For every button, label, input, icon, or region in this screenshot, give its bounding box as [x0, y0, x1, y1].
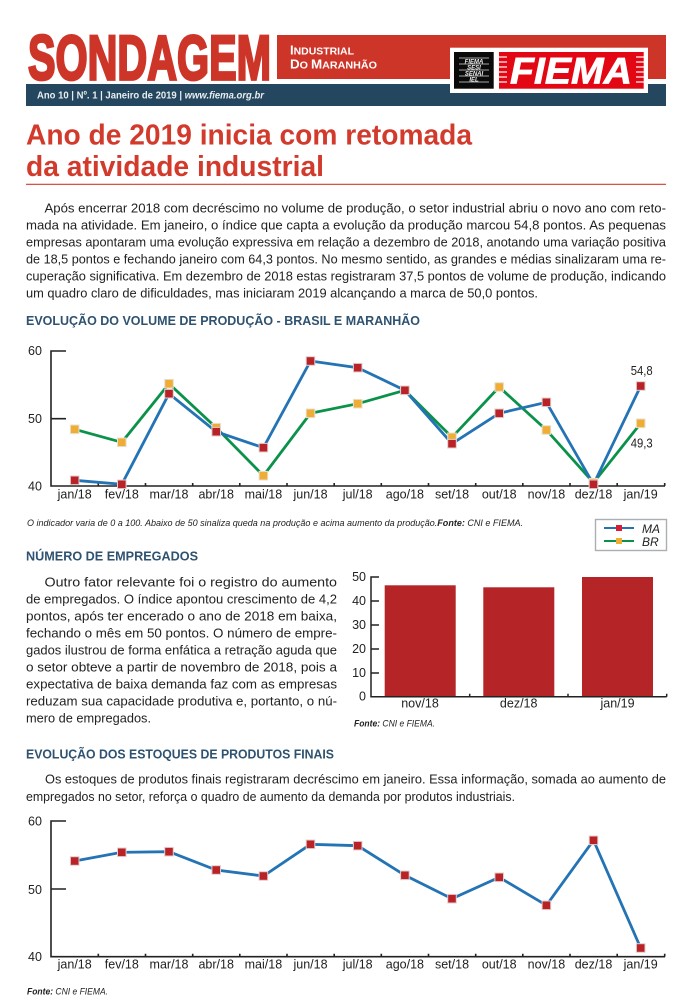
- line chart: production volume: jan/19: [623, 487, 658, 501]
- logo: FIEMA: SENAI: [465, 72, 483, 78]
- line chart: production volume: nov/18: [528, 487, 565, 501]
- line chart: production volume: fev/18: [105, 487, 139, 501]
- masthead title: SONDAGEM: [28, 24, 271, 94]
- main title: da atividade industrial: [26, 151, 324, 183]
- line chart: production volume: mai/18: [245, 487, 282, 501]
- bar chart: employees: 20: [352, 642, 366, 656]
- intro paragraph: Após encerrar 2018 com decréscimo no volume de produção, o setor industrial abriu o novo ano com reto-: [44, 201, 666, 216]
- employees paragraph: fechando o mês em 50 pontos. O número de empre-: [26, 626, 337, 641]
- line chart: production volume: 50: [28, 412, 42, 426]
- line chart: stocks: jul/18: [342, 958, 373, 972]
- intro paragraph: cuperação significativa. Em dezembro de 2018 estas registraram 37,5 pontos de volume de produção, indicando: [26, 269, 666, 284]
- line chart: production volume: out/18: [482, 487, 517, 501]
- bar chart: employees: 30: [352, 618, 366, 632]
- masthead subtitle: DO MARANHÃO: [290, 58, 377, 72]
- series: BR: [75, 384, 641, 483]
- main title: [26, 119, 473, 183]
- line chart: production volume: 60: [28, 344, 42, 358]
- line chart: stocks: ago/18: [386, 958, 424, 972]
- series: stocks: [75, 840, 641, 948]
- line chart: stocks: set/18: [435, 958, 469, 972]
- employees paragraph: pontos, após ter encerado o ano de 2018 em baixa,: [26, 609, 337, 624]
- bar chart source: Fonte: CNI e FIEMA.: [354, 719, 435, 730]
- logo: FIEMA: IEL: [469, 78, 479, 84]
- logo: FIEMA: FIEMA: [510, 50, 632, 91]
- chart note: O indicador varia de 0 a 100. Abaixo de 50 sinaliza queda na produção e acima aumento da produção.Fonte: CNI e FIEMA.: [27, 518, 523, 529]
- markers: stocks: [70, 836, 645, 952]
- line chart: production volume: mar/18: [150, 487, 188, 501]
- intro paragraph: empresas apontaram uma evolução expressiva em relação a dezembro de 2018, anotando uma variação positiva: [26, 235, 667, 250]
- stocks chart source: Fonte: CNI e FIEMA.: [27, 986, 108, 997]
- bar chart: employees: nov/18: [401, 696, 439, 710]
- line chart: stocks: jan/19: [623, 958, 658, 972]
- line chart: production volume: jan/18: [57, 487, 92, 501]
- bar chart: employees: 50: [352, 570, 366, 584]
- line chart: stocks: jan/18: [57, 958, 92, 972]
- employees paragraph: [26, 575, 338, 726]
- bar chart: employees: 0: [359, 690, 366, 704]
- line chart: stocks: 50: [28, 883, 42, 897]
- intro paragraph: [26, 201, 667, 300]
- intro paragraph: mada na atividade. Em janeiro, o índice que capta a evolução da produção marcou 54,8 pontos. As pequenas: [26, 218, 667, 233]
- bar chart: employees: 40: [352, 594, 366, 608]
- markers: BR: [70, 379, 645, 487]
- line chart: production volume: set/18: [435, 487, 469, 501]
- heading: production: EVOLUÇÃO DO VOLUME DE PRODUÇÃO - BRASIL E MARANHÃO: [26, 313, 420, 328]
- red band: [277, 35, 666, 79]
- bar chart: employees: [352, 570, 667, 710]
- bar chart: employees: dez/18: [500, 696, 538, 710]
- line chart: stocks: mar/18: [150, 958, 188, 972]
- stocks paragraph: Os estoques de produtos finais registraram decréscimo em janeiro. Essa informação, somada ao aumento de: [45, 771, 666, 786]
- series: MA: [75, 361, 641, 484]
- masthead subtitle: INDUSTRIAL: [290, 44, 354, 58]
- line chart: stocks: abr/18: [198, 958, 234, 972]
- main title: Ano de 2019 inicia com retomada: [26, 119, 473, 151]
- line chart: production volume: abr/18: [198, 487, 234, 501]
- line chart: stocks: dez/18: [575, 958, 612, 972]
- line chart: production volume: dez/18: [575, 487, 612, 501]
- heading: employees: NÚMERO DE EMPREGADOS: [26, 549, 198, 564]
- value label: MA: 54,8: [631, 364, 653, 378]
- bar chart: employees: jan/19: [599, 696, 635, 710]
- legend: BR: [642, 535, 659, 549]
- employees paragraph: mero de empregados.: [26, 711, 151, 726]
- line chart: stocks: out/18: [482, 958, 517, 972]
- line chart: production volume: jun/18: [292, 487, 328, 501]
- legend: [596, 520, 666, 550]
- header banner: [26, 24, 666, 106]
- line chart: production volume: 40: [28, 480, 42, 494]
- line chart: stocks: mai/18: [245, 958, 282, 972]
- masthead subtitle: [290, 44, 377, 72]
- heading: stocks: EVOLUÇÃO DOS ESTOQUES DE PRODUTOS FINAIS: [26, 746, 334, 762]
- line chart: production volume: ago/18: [386, 487, 424, 501]
- line chart: stocks: nov/18: [528, 958, 565, 972]
- employees paragraph: de empregados. O índice apontou crescimento de 4,2: [26, 591, 337, 606]
- line chart: stocks: [28, 815, 665, 972]
- logo: FIEMA: FIEMA: [465, 60, 483, 66]
- line chart: stocks: 60: [28, 815, 42, 829]
- employees paragraph: expectativa de baixa demanda faz com as empresas: [26, 677, 337, 692]
- blue issue bar: [26, 84, 666, 106]
- line chart: stocks: jun/18: [292, 958, 328, 972]
- employees paragraph: o setor obteve a partir de novembro de 2018, pois a: [26, 660, 338, 675]
- line chart: production volume: jul/18: [342, 487, 373, 501]
- stocks paragraph: empregados no setor, reforça o quadro de aumento da demanda por produtos industriais.: [26, 789, 515, 804]
- markers: MA: [70, 357, 645, 489]
- logo: FIEMA: [450, 48, 648, 93]
- intro paragraph: de 18,5 pontos e fechando janeiro com 64,3 pontos. No mesmo sentido, as grandes e médias sinalizaram uma re-: [26, 252, 666, 267]
- line chart: stocks: 40: [28, 950, 42, 964]
- logo: FIEMA: SESI: [467, 66, 481, 72]
- employees paragraph: Outro fator relevante foi o registro do aumento: [44, 575, 337, 590]
- line chart: production volume: [28, 344, 665, 501]
- intro paragraph: um quadro claro de dificuldades, mas iniciaram 2019 alcançando a marca de 50,0 pontos.: [26, 285, 538, 300]
- employees paragraph: gados ilustrou de forma enfática a retração aguda que: [26, 643, 337, 658]
- value label: BR: 49,3: [631, 436, 653, 450]
- bar chart: employees: 10: [352, 666, 366, 680]
- blue issue bar: Ano 10 | Nº. 1 | Janeiro de 2019 | www.fiema.org.br: [37, 90, 265, 102]
- legend: MA: [642, 522, 660, 536]
- line chart: stocks: fev/18: [105, 958, 139, 972]
- employees paragraph: reduzam sua capacidade produtiva e, portanto, o nú-: [26, 694, 337, 709]
- stocks paragraph: [26, 771, 666, 804]
